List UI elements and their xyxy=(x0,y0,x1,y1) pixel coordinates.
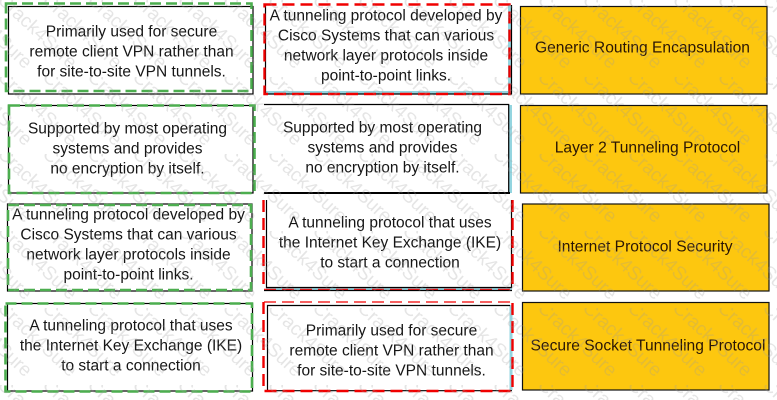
middle card row 2: supported by most operating systems xyxy=(264,104,512,194)
left card row 4: IKE tunneling protocol xyxy=(6,304,252,392)
middle card row 2: supported by most operating systems: no encryption by itself. xyxy=(305,160,460,176)
left card row 1: secure remote client VPN: for site-to-site VPN tunnels. xyxy=(37,64,226,80)
gold label: Secure Socket Tunneling Protocol xyxy=(522,302,769,390)
middle card row 4: secure remote client VPN: for site-to-site VPN tunnels. xyxy=(297,362,486,380)
gold label: Layer 2 Tunneling Protocol: Layer 2 Tunneling Protocol xyxy=(555,140,740,156)
middle card row 1: Cisco tunneling protocol: point-to-point links. xyxy=(321,68,451,84)
middle card row 2: supported by most operating systems: Supported by most operating xyxy=(283,120,482,136)
gold label: Layer 2 Tunneling Protocol xyxy=(520,106,767,193)
left card row 1: secure remote client VPN xyxy=(6,4,253,94)
left card row 4: IKE tunneling protocol: to start a connection xyxy=(61,358,201,374)
middle card row 2: supported by most operating systems: systems and provides xyxy=(308,140,458,156)
left card row 1: secure remote client VPN: Primarily used for secure xyxy=(46,24,217,40)
gold label: Internet Protocol Security xyxy=(522,204,769,291)
left card row 4: IKE tunneling protocol: A tunneling protocol that uses xyxy=(29,318,233,334)
left card row 4: IKE tunneling protocol: the Internet Key Exchange (IKE) xyxy=(20,338,242,354)
middle card row 3: IKE tunneling protocol xyxy=(264,200,512,290)
left card row 3: Cisco tunneling protocol: Cisco Systems that can various xyxy=(20,226,237,244)
left card row 3: Cisco tunneling protocol: network layer protocols inside xyxy=(26,246,231,264)
middle card row 4: secure remote client VPN: remote client VPN rather than xyxy=(289,342,494,360)
left card row 2: supported by most operating systems xyxy=(8,106,254,193)
left card row 3: Cisco tunneling protocol: A tunneling protocol developed by xyxy=(12,206,245,224)
middle card row 1: Cisco tunneling protocol xyxy=(264,4,512,94)
middle card row 3: IKE tunneling protocol: the Internet Key Exchange (IKE) xyxy=(279,234,501,252)
middle card row 1: Cisco tunneling protocol: network layer protocols inside xyxy=(284,48,488,64)
gold label: Generic Routing Encapsulation: Generic Routing Encapsulation xyxy=(535,40,750,56)
middle card row 3: IKE tunneling protocol: to start a connection xyxy=(320,254,460,272)
gold label: Generic Routing Encapsulation xyxy=(520,6,767,94)
left card row 3: Cisco tunneling protocol xyxy=(8,204,252,291)
gold label: Internet Protocol Security: Internet Protocol Security xyxy=(557,238,733,256)
middle card row 3: IKE tunneling protocol: A tunneling protocol that uses xyxy=(288,214,492,232)
left card row 2: supported by most operating systems: systems and provides xyxy=(53,140,203,158)
left card row 2: supported by most operating systems: Supported by most operating xyxy=(28,120,227,138)
left card row 2: supported by most operating systems: no encryption by itself. xyxy=(50,160,205,178)
middle card row 4: secure remote client VPN xyxy=(264,302,512,391)
left card row 1: secure remote client VPN: remote client VPN rather than xyxy=(29,44,234,60)
middle card row 4: secure remote client VPN: Primarily used for secure xyxy=(306,322,477,340)
left card row 3: Cisco tunneling protocol: point-to-point links. xyxy=(63,266,194,284)
middle card row 1: Cisco tunneling protocol: A tunneling protocol developed by xyxy=(270,8,503,24)
middle card row 1: Cisco tunneling protocol: Cisco Systems that can various xyxy=(278,28,494,44)
gold label: Secure Socket Tunneling Protocol: Secure Socket Tunneling Protocol xyxy=(531,338,765,354)
